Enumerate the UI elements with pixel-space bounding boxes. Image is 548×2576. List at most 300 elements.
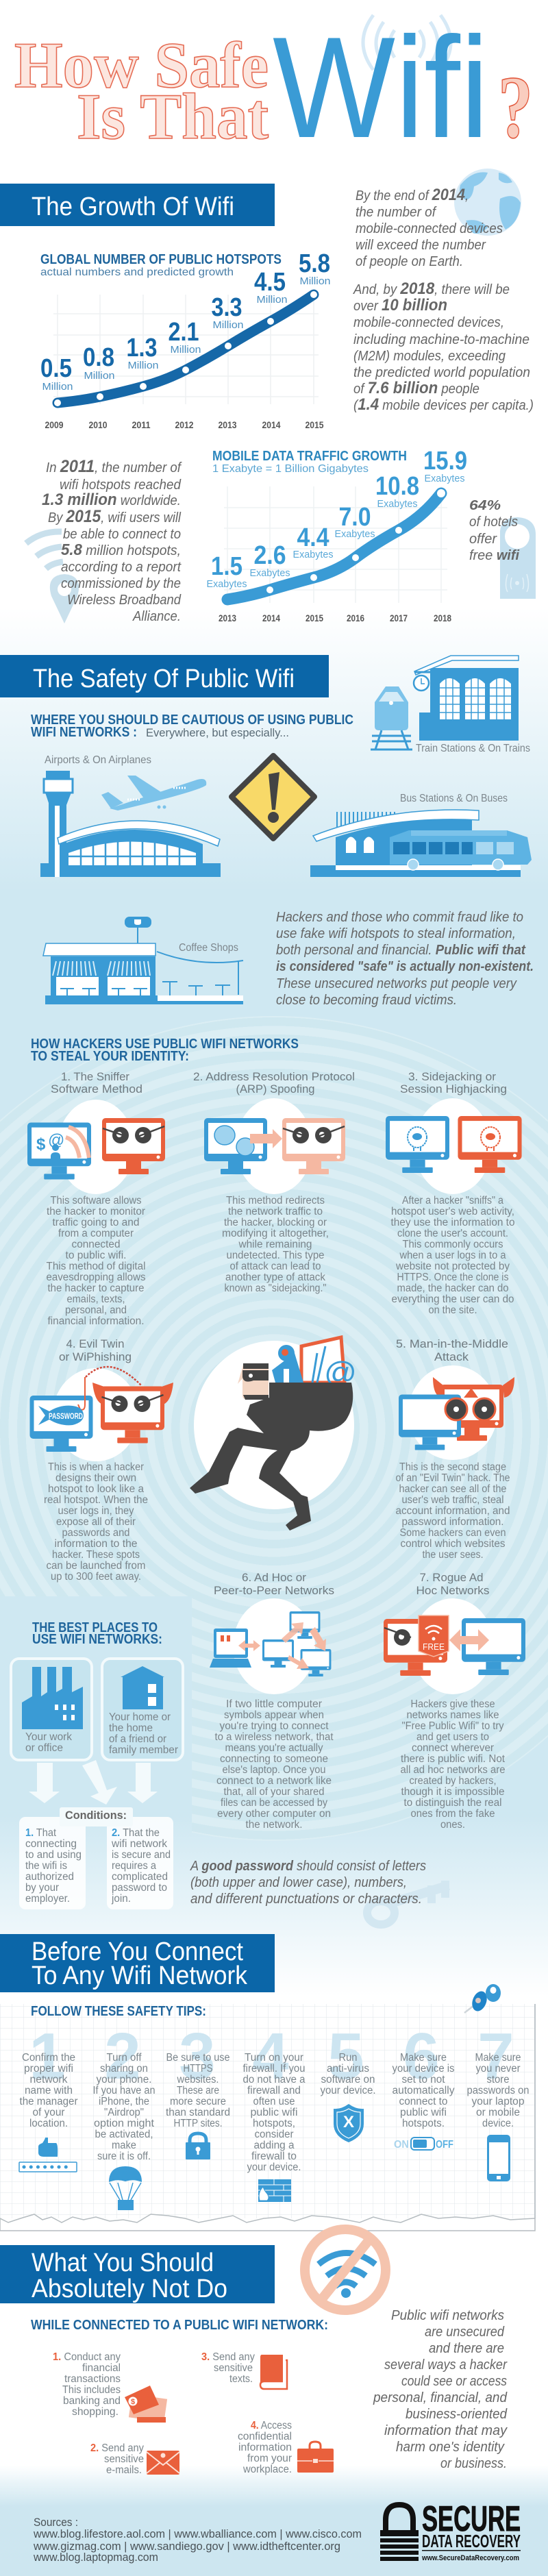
tip 2: Turn off [107,2052,142,2064]
list item 1: financial transactions: financial [82,2362,121,2374]
condition 1 card: employer. [25,1893,70,1905]
item text: This commonly occurs [403,1239,503,1250]
card: home: the home [109,1722,153,1734]
tip 4: your device. [247,2162,301,2173]
item title: Peer-to-Peer Networks [214,1584,334,1597]
panel: 7 rogue ad hoc [384,1571,525,1831]
item text: that, all of your shared [223,1786,325,1798]
condition 2 card: 2. That the [112,1827,160,1839]
value labels: 0.5 [40,354,72,383]
tip 4: do not have a [242,2074,306,2085]
icon: faint key [367,1881,449,1924]
text block: 2011 hotspots [42,457,182,624]
item title: 2. Address Resolution Protocol [193,1070,355,1083]
year axis: 2016 [347,612,364,623]
computers [30,1367,173,1452]
year axis [219,612,451,623]
tip 4: firewall to [251,2151,297,2162]
chart subheading: actual numbers and predicted growth [40,267,234,278]
heading [32,1620,162,1647]
computers [399,1377,514,1450]
logo: secure data recovery [380,2499,521,2562]
item text: can be launched from [47,1560,145,1572]
tip 1: proper wifi [24,2063,73,2075]
conditions label: Conditions: [65,1809,127,1822]
icon: credit cards: $ [131,2398,135,2406]
big tip numbers: 7 [477,2020,514,2093]
year axis: 2015 [306,612,323,623]
list item 1: financial transactions [53,2351,121,2418]
text block: 2011 hotspots: be able to connect to [63,527,181,542]
tips heading: FOLLOW THESE SAFETY TIPS: [31,2004,206,2019]
item title [400,1070,507,1095]
year axis: 2015 [306,419,324,430]
value labels: Million [212,319,244,331]
list item 4: confidential information: workplace. [242,2464,292,2475]
text block: devices exceed people [356,186,503,269]
value labels: 3.3 [211,293,242,322]
year axis: 2010 [89,419,108,430]
item text: the network. [245,1819,303,1831]
title: How Safe: How Safe [14,29,269,101]
section heading: The Growth Of Wifi: The Growth Of Wifi [32,193,234,221]
item text: symbols appear when [224,1709,324,1721]
tip 2: make [112,2140,136,2151]
year axis: 2017 [390,612,408,623]
item text: HTTPS. Once the clone is [397,1272,509,1283]
text block: 64 percent of hotels: offer [469,532,497,547]
item text: eavesdropping allows [47,1272,146,1283]
item title [416,1571,489,1597]
spotlight [414,1098,491,1194]
tip 4: often use [253,2096,295,2107]
item text: else's laptop. Once you [222,1764,326,1776]
panel: 2 ARP spoofing [193,1070,355,1294]
tip 4: hotspots, [253,2118,295,2129]
card: home: family member [109,1744,178,1756]
year axis: 2013 [219,612,236,623]
tip 5: anti-virus [327,2063,369,2075]
item text: the hacker to capture [48,1283,144,1294]
tip 1: location. [29,2118,68,2129]
condition 2 card: is secure and [112,1849,171,1861]
big tip numbers: 1 [29,2020,66,2093]
tip 5: Run [338,2052,358,2064]
text block: public wifi unsecured: or business. [440,2456,507,2471]
value labels: Exabytes [207,578,247,590]
item title [214,1571,334,1597]
text block: public wifi unsecured: several ways a hacker [384,2357,508,2373]
panel: best places to use wifi [11,1620,183,1909]
value labels: 1.5 [211,552,242,581]
logo padlock [380,2505,419,2561]
text block: public wifi unsecured: are unsecured [425,2325,505,2340]
tip 4: adding a [253,2140,295,2151]
item text: while remaining [238,1239,312,1250]
computers: PASSWORD [49,1411,83,1421]
sources: Sources : [34,2516,78,2529]
heading: where to be cautious [31,713,353,740]
value labels: Million [127,360,159,371]
hacker head [238,1365,269,1399]
item text: clone the user's account. [397,1228,508,1239]
text block: 64 percent of hotels [469,498,519,563]
value labels: Exabytes [293,549,333,560]
icon: credit cards [125,2386,167,2423]
panel: safety tips paper [0,1984,535,2231]
item text: passwords and [62,1527,130,1539]
data points [266,489,445,593]
title: Is That: Is That [77,80,269,153]
list item 1: financial transactions: transactions [64,2373,121,2385]
text block: devices exceed people: will exceed the number [356,238,486,253]
text block: 2011 hotspots: Alliance. [132,609,181,624]
arrows [236,1640,260,1668]
item text: hotspot to look like a [48,1483,144,1495]
computers [386,1116,522,1173]
list item 1: financial transactions: 1. Conduct any [53,2351,121,2363]
chart: mobile data traffic growth [207,447,467,623]
text block: ten billion devices: mobile-connected devices, [353,315,504,330]
big tip numbers: 3 [179,2020,216,2093]
tip 1: network [30,2074,68,2085]
big tip numbers: 6 [403,2020,440,2093]
heading: while connected: WHILE CONNECTED TO A PUBLIC WIFI NETWORK: [31,2318,328,2333]
text block: public wifi unsecured: business-oriented [406,2407,508,2422]
card: work or office: or office [25,1742,63,1754]
panel: 4 evil twin [30,1337,173,1583]
item text: hotspot user's web activity, [391,1206,514,1217]
stolen items [272,1337,357,1389]
chart heading: MOBILE DATA TRAFFIC GROWTH [212,449,407,464]
shop sign [125,917,151,928]
list item 4: confidential information [238,2420,292,2475]
icon: envelope [147,2451,179,2475]
tip 7: or mobile [476,2107,520,2118]
wifi signal rings background [0,1016,548,1884]
tip 2: your phone. [96,2074,152,2085]
tip 2 [93,2052,155,2162]
section heading: The Growth Of Wifi [0,184,275,226]
bus [390,830,532,865]
tip 7: you never [475,2063,521,2075]
icon: padlock [186,2133,210,2159]
label: coffee shops: Coffee Shops [179,942,238,954]
list item 1: financial transactions: shopping. [72,2406,119,2418]
phishing fish [38,1406,84,1425]
text block: ten billion devices: (M2M) modules, exceeding [353,349,506,364]
item title: Session Highjacking [400,1082,507,1095]
item text: means you're actually [225,1742,323,1754]
list item 1: financial transactions: This includes [62,2384,121,2396]
icon: map pin with wifi [26,532,79,623]
item text: there is public wifi. Not [401,1753,506,1765]
item text: emails, texts, [67,1293,125,1305]
year axis: 2014 [262,612,280,623]
condition 1 card: to and using [25,1849,82,1861]
computers [204,1118,345,1174]
heading: how hackers use public wifi: TO STEAL YOUR IDENTITY: [31,1049,189,1064]
section heading: Before You Connect: To Any Wifi Network [32,1961,248,1990]
item title: or WiPhishing [59,1350,132,1363]
list item 3: sensitive texts: sensitive [214,2362,253,2374]
tip 3: websites. [177,2074,219,2085]
item text: personal, and [65,1304,127,1316]
panel: 5 man in the middle [396,1337,514,1561]
item text: the hacker to monitor [47,1206,145,1217]
awnings [53,961,150,976]
list item 2: sensitive e-mails [90,2442,144,2476]
text block: public wifi unsecured: harm one's identity [396,2440,505,2455]
item text: ones from the fake [411,1808,495,1820]
item text: everything the user can do [392,1293,514,1305]
tip 4 [242,2052,306,2173]
text block: public wifi unsecured: Public wifi networks [391,2308,504,2323]
item text: hacker can see all of the [399,1483,507,1495]
text block: 2011 hotspots: 1.3 million worldwide. [42,491,181,509]
item title: 1. The Sniffer [61,1070,129,1083]
item text: connect to a network like [216,1775,332,1787]
item text: known as "sidejacking." [225,1283,326,1294]
list item 3: sensitive texts: texts. [229,2373,253,2385]
tip 7: passwords on [467,2085,529,2096]
condition 2 card [107,1817,173,1909]
item text: This is the second stage [399,1461,506,1473]
item text: the network traffic to [228,1206,323,1217]
item text: of attack can lead to [230,1261,321,1272]
sources: www.blog.lifestore.aol.com | www.wballiance.com | www.cisco.com [33,2527,362,2540]
text block: 64 percent of hotels: of hotels [469,515,518,530]
condition 2 card: requires a [112,1860,156,1872]
item text [396,1461,510,1561]
tip 6: Make sure [400,2052,447,2064]
list item 1: financial transactions: banking and [63,2395,121,2407]
station windows [346,837,374,853]
text block: 64 percent of hotels: free wifi [469,548,519,563]
patio tables [162,982,230,995]
grid paper [0,2004,535,2218]
item text: After a hacker "sniffs" a [402,1195,503,1206]
condition 1 card: the wifi is [25,1860,67,1872]
text block: 2011 hotspots: Wireless Broadband [67,593,182,608]
text block: public wifi unsecured: information that may [384,2423,508,2438]
sources: www.blog.laptopmag.com [33,2551,158,2564]
text block: ten billion devices: including machine-to-machine [353,332,530,347]
item text: "Free Public Wifi" to try [401,1720,504,1732]
item text: on the site. [429,1304,477,1316]
station windows [440,678,511,719]
tip 3 [166,2052,230,2129]
section heading: What You Should Absolutely Not Do [0,2245,275,2303]
item text: designs their own [55,1472,136,1484]
tip 7: your laptop [471,2096,525,2107]
item text: another type of attack [225,1272,325,1283]
tip 3: HTTPS [184,2063,212,2075]
item text: networks names like [407,1709,499,1721]
text block: 2011 hotspots: In 2011, the number of [46,457,182,476]
heading: how hackers use public wifi [31,1037,299,1064]
item text: created by hackers, [410,1775,496,1787]
item text: every other computer on [217,1808,331,1820]
section heading: What You Should Absolutely Not Do: Absolutely Not Do [32,2275,227,2303]
spotlight [194,1341,354,1509]
label: train stations: Train Stations & On Trains [416,743,530,754]
heading: THE BEST PLACES TO [32,1620,158,1635]
card: home: of a friend or [109,1733,166,1745]
item text: If two little computer [226,1698,322,1710]
item text [47,1195,146,1327]
airplane [101,776,206,810]
heading: where to be cautious: WHERE YOU SHOULD BE CAUTIOUS OF USING PUBLIC [31,713,353,728]
conditions label [60,1807,133,1826]
item text: ones. [440,1819,465,1831]
icon: bus station [310,810,532,877]
item text: Hackers give these [411,1698,495,1710]
text block: good password: (both upper and lower case), numbers, [190,1875,407,1890]
tip 5: software on [321,2074,375,2085]
icon: phone [487,2135,510,2181]
free banner [419,1615,449,1657]
title: wifi waves [363,15,451,70]
icon: coffee shop [43,917,243,1004]
item text: website not protected by [395,1261,510,1272]
icon: book [260,2355,287,2389]
tracks [371,730,412,750]
item text: expose all of their [56,1516,136,1528]
item text: This method redirects [226,1195,325,1206]
tip 1: Confirm the [22,2052,75,2064]
train [375,686,408,730]
spotlight [53,1368,139,1461]
text block: 64 percent of hotels: 64% [469,498,501,513]
value labels: 4.4 [297,523,329,552]
item text [400,1698,506,1831]
tip 2: be activated, [95,2129,153,2140]
year axis: 2012 [175,419,194,430]
text block: devices exceed people: mobile-connected devices [356,221,503,236]
item title: 3. Sidejacking or [408,1070,496,1083]
tip 4: firewall and [247,2085,301,2096]
torn edge [0,2214,535,2231]
tip 2: "Airdrop" [104,2107,144,2118]
chart: global public hotspots [40,249,330,430]
growth line [58,295,314,403]
tip 6: set to not [401,2074,445,2085]
tip 7: device. [482,2118,514,2129]
item text: the user sees. [422,1549,484,1561]
value labels: Million [42,381,73,393]
big tip numbers: 4 [252,2020,289,2093]
icon: train station [371,656,519,750]
card: work or office: Your work [25,1731,72,1743]
item text: This method of digital [47,1261,145,1272]
tip 6 [392,2052,455,2129]
icon: globe [454,169,521,236]
item text [390,1195,515,1316]
icon: airport [40,771,221,877]
tip 1: of your [33,2107,64,2118]
tip 7: Make sure [475,2052,521,2064]
text block: ten billion devices: of 7.6 billion people [353,379,480,397]
item text: you're trying to connect [219,1720,329,1732]
text block: 2011 hotspots: wifi hotspots reached [60,478,182,493]
clock [414,676,429,691]
icon: parachute [109,2166,142,2210]
spotlight [236,1098,312,1194]
growth line [227,493,441,599]
item title: Attack [434,1350,469,1363]
item text: real hotspot. When the [44,1494,148,1506]
item title: 6. Ad Hoc or [242,1571,306,1584]
tip 1: name with [25,2085,73,2096]
value labels: 4.5 [254,268,286,297]
tip 6: your device is [392,2063,455,2075]
item text: from a computer [58,1228,134,1239]
text block: public wifi unsecured: could see or access [401,2374,507,2389]
icon: warning sign [232,756,314,839]
label: airports: Airports & On Airplanes [45,754,151,766]
text block: good password: and different punctuations or characters. [190,1892,422,1907]
patio canopy [157,952,243,995]
panel: 6 ad hoc peer to peer [210,1571,334,1831]
text block: hackers use fake hotspots [276,910,534,1008]
computers: $ [36,1135,46,1154]
item text: modifying it altogether, [222,1228,329,1239]
item title: 4. Evil Twin [66,1337,125,1350]
tip 1: the manager [19,2096,78,2107]
item text: user logs in, they [58,1505,134,1517]
big tip numbers: 5 [327,2020,364,2093]
text block: 2011 hotspots: commissioned by the [61,576,181,591]
text block: ten billion devices: (1.4 mobile devices per capita.) [353,395,534,414]
list item 4: confidential information: information [238,2442,292,2453]
heading: where to be cautious: Everywhere, but especially... [146,726,289,739]
heading: USE WIFI NETWORKS: [32,1632,162,1647]
title [14,7,533,168]
condition 1 card: authorized [25,1871,74,1883]
text block: ten billion devices: the predicted world population [353,365,530,380]
item text: account information, and [396,1505,510,1517]
chart subheading: 1 Exabyte = 1 Billion Gigabytes [212,463,369,475]
logo: secure data recovery: www.SecureDataRecovery.com [421,2554,519,2562]
arrows to conditions [29,1760,158,1805]
panel: 1 the sniffer software method [27,1070,165,1327]
sources [33,2516,362,2564]
text block: hackers use fake hotspots: use fake wifi hotspots to steal information, [276,926,516,941]
big tip numbers [29,2020,514,2093]
text block: devices exceed people: of people on Earth. [356,254,463,269]
item text: This is when a hacker [48,1461,144,1473]
item title [193,1070,355,1095]
year axis: 2009 [45,419,64,430]
tip 5 [321,2052,375,2096]
item text: they use the information to [390,1217,515,1228]
icon: on off toggle [394,2138,453,2151]
value labels: Million [300,275,330,287]
section heading: The Safety Of Public Wifi [0,655,329,697]
item text: control which websites [400,1538,506,1550]
icon: briefcase [297,2442,334,2473]
item title: 7. Rogue Ad [419,1571,484,1584]
item text: when a user logs in to a [399,1250,506,1261]
icon: door hanger [500,517,536,599]
icon: on off toggle: OFF [436,2139,453,2151]
text block: 2011 hotspots: 5.8 million hotspots, [61,541,181,558]
card: work or office [11,1659,92,1760]
tip 7 [467,2052,529,2129]
item text: to a wireless network, that [215,1731,334,1743]
computers: FREE [423,1642,445,1652]
